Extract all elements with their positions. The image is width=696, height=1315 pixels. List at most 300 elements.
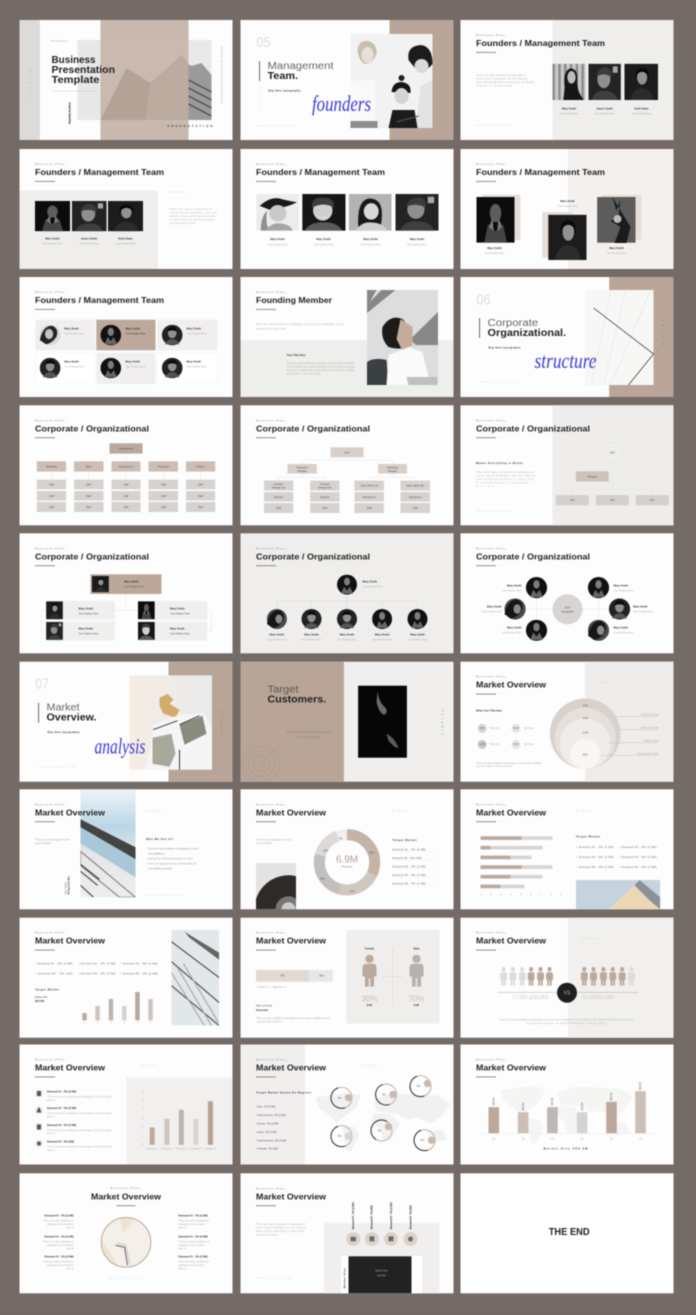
heading: Market Overview <box>35 936 105 946</box>
org chart: Production <box>296 466 309 469</box>
org chart: Staff <box>49 483 54 486</box>
org chart: Sales Officer (A) <box>360 484 378 487</box>
slide: market regions map <box>240 1044 454 1164</box>
left notes: form of <box>66 1247 74 1250</box>
who we sell: • Form, by injected humour, words which do <box>146 862 197 865</box>
org chart: Manager (A) <box>272 486 285 489</box>
org chart: Sales Officer (B) <box>406 484 424 487</box>
heading: Business Plan_ <box>256 1058 287 1062</box>
target market list <box>576 809 657 869</box>
horizontal bar chart <box>480 836 563 896</box>
heading: Business Plan_ <box>35 931 66 935</box>
card names: Mary Smith <box>64 360 79 364</box>
paragraph: There are many variations of passages of Lorem Ipsum available, but the majority have suffered alteration in some form <box>499 1019 635 1022</box>
who we sell: • Having the suffered alteration in some <box>146 857 193 860</box>
column chart: Category 1 <box>146 1148 159 1150</box>
cover title <box>52 39 115 91</box>
nested circle chart: 2.2M <box>583 732 588 735</box>
staff cards: Your Position Here <box>78 612 99 615</box>
paragraph: Ipsum available <box>256 842 273 845</box>
target market list: • Demand #1 - 5% (2.5M) <box>576 846 614 849</box>
region rings: 5% <box>417 1085 421 1088</box>
slide: market oval image <box>20 1173 232 1293</box>
split bar: • Staff 1 • Market 1 <box>256 986 287 989</box>
heading: Business Plan_ <box>256 162 287 166</box>
slide: market circles <box>460 662 674 782</box>
paragraph: have suffered alteration in some form, by injected <box>476 81 535 84</box>
versus badge <box>498 983 638 1003</box>
market size card <box>340 1256 422 1293</box>
heading <box>476 675 546 694</box>
gender panel: Male <box>414 947 420 951</box>
target market list: • Demand #3 - 5% (2.5M) <box>576 856 614 859</box>
team names: Your Position Here <box>267 638 287 641</box>
bar chart: Q1 <box>492 1138 496 1140</box>
sub text: Your Title Here <box>286 353 306 357</box>
names: Mary Smith <box>560 199 575 203</box>
section title: Big Idea typography <box>488 346 521 350</box>
stat pills: 2.5M <box>480 743 485 746</box>
slide: org chart five columns <box>20 405 232 525</box>
org chart: Staff <box>49 506 54 509</box>
right notes: form of <box>178 1267 186 1270</box>
icon list <box>35 1090 112 1152</box>
names: Kelly Dawn <box>118 236 133 240</box>
org chart <box>556 443 669 505</box>
staff cards: Your Position Here <box>170 632 191 635</box>
portraits <box>552 64 658 100</box>
heading <box>35 418 149 438</box>
right notes: There are many variations of <box>178 1240 209 1243</box>
labels: Mary Smith <box>507 583 522 587</box>
right notes: There are many variations of <box>178 1219 209 1222</box>
slide: market demand list and chart <box>20 1044 232 1164</box>
slide: market size bars <box>460 1044 674 1164</box>
market size label: Market Size 589.3M <box>544 1146 588 1150</box>
bar chart: Q3 <box>551 1138 555 1140</box>
donut chart: Prognosis <box>342 866 353 869</box>
world map <box>316 1092 450 1152</box>
section number: 06 <box>476 292 490 308</box>
right notes: Demand #1 - 5% (2.5M) <box>178 1255 208 1259</box>
region list: • Asia - 5% (2.5M) <box>256 1106 275 1108</box>
demand list: • Demand #5 - 5% (2.5M) <box>78 972 116 975</box>
website: www.strategyix.com <box>480 380 518 384</box>
column chart: 5 <box>142 1100 144 1102</box>
labels: Your Position Here <box>502 631 522 634</box>
heading <box>256 802 326 822</box>
heading: Business Plan_ <box>35 546 66 550</box>
market size: Market Size <box>35 996 48 999</box>
slide: org chart CEO tree <box>240 405 454 525</box>
donut chart: 15% <box>323 849 329 852</box>
who we sell: www.strategyix.com <box>146 892 184 896</box>
target market list: • Demand #2 - 5% (2.5M) <box>620 846 657 849</box>
team names: Mary Smith <box>304 632 319 636</box>
section title: Organizational. <box>488 328 566 339</box>
org chart <box>264 447 430 513</box>
labels: Your Position Here <box>614 631 634 634</box>
bar chart: $35.5M <box>610 1093 613 1100</box>
heading <box>476 546 590 566</box>
card names: Mary Smith <box>64 327 79 331</box>
section title: Management <box>268 61 334 72</box>
slide: market horizontal bars <box>460 789 674 909</box>
names: Mary Smith <box>487 246 502 250</box>
icon list: There are many variations of passages of Lorem Ipsum <box>47 1096 112 1098</box>
icon list: Demand #1 - 5% (2.5M) <box>47 1090 76 1094</box>
heading: Business Plan_ <box>256 802 287 806</box>
paragraph: There are many variations of passages of Lorem Ipsum available, but the <box>256 323 345 326</box>
org chart: Staff <box>413 507 418 510</box>
org chart: Staff <box>161 483 166 486</box>
right notes <box>178 1214 209 1270</box>
side kicker: PixFlon_ <box>142 1064 160 1068</box>
team names: Mary Smith <box>270 632 284 636</box>
side text: PixFlon_ <box>170 191 187 194</box>
photo: building <box>78 40 212 120</box>
names: Your Position Here <box>268 244 288 246</box>
card names: Your Position Here <box>64 365 85 368</box>
left notes: passage of Lorem Ipsum <box>47 1223 74 1226</box>
heading: Corporate / Organizational <box>476 423 590 433</box>
names <box>485 199 627 255</box>
column chart: Category 4 <box>190 1148 202 1150</box>
cover title: Template <box>52 75 100 86</box>
paragraph: by injected humour, or randomised words looking slightly <box>527 1022 608 1025</box>
heading <box>476 931 546 950</box>
section title <box>479 318 566 350</box>
slide: the end <box>460 1173 674 1293</box>
org chart: Staff <box>198 495 203 498</box>
oval image <box>101 1217 151 1267</box>
center circle <box>552 594 582 624</box>
heading: Market Overview <box>256 807 326 817</box>
region rings: 5% <box>382 1094 387 1096</box>
centered heading: Market Overview <box>91 1191 161 1201</box>
org chart: Assistant <box>274 483 284 486</box>
org chart: Staff <box>49 495 54 498</box>
gender panel: 9.9K <box>367 1003 372 1007</box>
heading: Founders / Management Team <box>476 38 605 48</box>
split bar <box>256 970 333 989</box>
heading: Business Plan_ <box>256 546 287 550</box>
round portraits <box>40 325 182 378</box>
column chart: 2 <box>97 1022 99 1025</box>
stat pills: 5.5K <box>514 743 519 746</box>
slide: founders card grid <box>20 277 232 397</box>
region list: • South America - 5% (2.5M) <box>256 1140 286 1142</box>
paragraph: Lorem Ipsum available, but the majority <box>476 78 529 80</box>
org chart: Manager <box>388 470 397 473</box>
slide: target customers <box>240 662 454 782</box>
org chart: Marketing <box>46 465 57 468</box>
icon list: form of <box>47 1116 55 1118</box>
website: www.strategyix.com <box>108 1276 145 1280</box>
vertical side labels: SIMPLEX <box>30 70 32 96</box>
paragraph <box>35 838 70 845</box>
heading: Founders / Management Team <box>35 167 164 177</box>
market size <box>35 987 59 1003</box>
photo: team of three <box>350 34 432 128</box>
stat pills: Title Here <box>490 727 500 730</box>
target market list: PixFlon_ <box>392 809 410 812</box>
names <box>559 106 652 116</box>
paragraph <box>476 762 543 768</box>
target market list: PixFlon_ <box>576 809 594 812</box>
heading <box>35 290 164 310</box>
gender panel <box>346 930 440 1024</box>
paragraph <box>499 1019 635 1025</box>
labels: Mary Smith <box>614 583 628 587</box>
org chart: Development <box>119 465 133 468</box>
paragraph <box>476 74 535 88</box>
section title: Corporate <box>488 318 539 329</box>
org chart: Staff <box>124 483 129 486</box>
paragraph <box>256 838 292 845</box>
org chart: Salesperson <box>409 496 423 499</box>
paragraph <box>256 1223 307 1236</box>
stat pills: Title Here <box>524 743 534 746</box>
section title: Overview. <box>46 713 97 724</box>
nested circle chart <box>550 698 620 769</box>
card names: Mary Smith <box>126 360 140 364</box>
chart callouts: Market Share <box>644 740 659 743</box>
heading: Business Plan_ <box>256 1186 287 1190</box>
left notes: form of <box>66 1267 74 1270</box>
heading: Corporate / Organizational <box>256 551 370 561</box>
icon pins with vertical labels <box>346 1202 418 1246</box>
staff cards: Mary Smith <box>78 606 93 610</box>
staff cards: Mary Smith <box>170 627 185 631</box>
vertical side labels: Prepared by Your Name <box>68 102 72 124</box>
heading <box>256 546 370 566</box>
website: www.strategyix.com <box>476 508 514 512</box>
heading <box>35 546 149 566</box>
section title <box>38 703 97 734</box>
team names <box>267 632 428 641</box>
left notes: Demand #1 - 5% (2.5M) <box>44 1235 74 1239</box>
names: Mary Smith <box>562 106 577 110</box>
donut chart: 6.9M <box>336 854 358 865</box>
donut chart: 7% <box>339 837 343 840</box>
chart callouts: Market Potential <box>641 727 659 730</box>
sub text <box>286 353 355 376</box>
team names: Mary Smith <box>410 632 425 636</box>
heading <box>256 1058 326 1077</box>
names: Your Position Here <box>407 244 428 246</box>
staff cards: Your Position Here <box>78 632 99 635</box>
heading: Business Plan_ <box>35 162 66 166</box>
heading: Business Plan_ <box>476 802 507 806</box>
org chart: Staff <box>367 507 372 510</box>
org chart: Engineer <box>274 496 283 499</box>
org chart: Assistant <box>320 483 330 486</box>
staff cards: Mary Smith <box>78 627 93 631</box>
heading <box>476 1058 546 1077</box>
heading: Corporate / Organizational <box>476 551 590 561</box>
org chart: Staff <box>86 495 91 498</box>
portrait cards <box>476 195 641 260</box>
website: www.strategyix.com <box>39 765 77 769</box>
org chart: Staff <box>86 506 91 509</box>
bar chart: $25.5M <box>522 1103 525 1110</box>
heading <box>476 418 590 438</box>
team names: Your Position Here <box>372 638 393 641</box>
heading: Business Plan_ <box>35 418 66 422</box>
left notes: There are many variations of <box>43 1219 74 1222</box>
presentation label: PRESENTATION <box>168 124 213 128</box>
org chart: Staff <box>276 507 281 510</box>
org chart: Finance <box>196 465 205 468</box>
labels: Your Position Here <box>502 589 522 592</box>
heading: Market Overview <box>256 1062 326 1072</box>
script word: structure: structure <box>534 348 597 373</box>
heading <box>35 162 164 182</box>
card names: Mary Smith <box>186 360 201 364</box>
bar chart: Q4 <box>580 1138 584 1140</box>
center circle: Best <box>565 606 570 609</box>
section title: Big Idea typography <box>268 88 301 92</box>
target icon <box>244 746 280 782</box>
target market list: Demand #5 - 5% (2.5M) <box>392 883 426 886</box>
region list: Target Market Based On Regions <box>256 1090 312 1094</box>
centered heading: Business Plan_ <box>110 1186 142 1190</box>
heading <box>35 1058 105 1077</box>
photo: vinyl <box>255 862 297 910</box>
slide: founding member <box>240 277 454 397</box>
totals <box>512 995 614 1001</box>
photo: dark arms <box>358 686 407 758</box>
paragraph: Lorem Ipsum available <box>296 736 321 739</box>
side text: randomised words <box>170 222 196 225</box>
names: Mary Smith <box>363 237 378 241</box>
demand list: • Demand #2 - 5% (2.5M) <box>78 963 116 966</box>
icon pins with vertical labels: Demand #4 - 5% (2M) <box>408 1205 412 1229</box>
column chart: 1 <box>142 1134 144 1138</box>
right notes: passage of Lorem Ipsum <box>178 1244 205 1247</box>
website: www.strategyix.com <box>256 1276 294 1280</box>
slide: founders three portraits <box>460 20 674 140</box>
right notes: passage of Lorem Ipsum <box>178 1264 205 1267</box>
text block: Overview <box>256 1008 269 1012</box>
column chart: 0 <box>142 1144 144 1146</box>
cover title: Presentation <box>52 65 115 76</box>
donut chart: 25% <box>320 877 326 880</box>
org chart: Engineer <box>320 496 330 499</box>
right notes: passage of Lorem Ipsum <box>178 1223 205 1226</box>
lead portrait <box>337 575 383 595</box>
center circle: Typography <box>561 610 575 613</box>
names: Your Position Here <box>361 244 381 246</box>
demand list: • Demand #6 - 5% (2.5M) <box>120 972 158 975</box>
names: Your Position Here <box>632 112 652 116</box>
section title: Customers. <box>268 695 326 706</box>
bar chart: $50.5M <box>639 1082 642 1090</box>
heading: Founders / Management Team <box>35 295 164 305</box>
text block: Male & Female <box>256 1005 273 1008</box>
team names: Mary Smith <box>340 632 355 636</box>
vertical label: SIMPLEX <box>220 709 224 735</box>
side text: in some form, by injected humour <box>170 218 215 222</box>
names: Your Position Here <box>559 112 580 116</box>
heading: Market Overview <box>476 807 546 817</box>
names: Mary Smith <box>609 246 624 250</box>
bar chart: Q2 <box>521 1138 525 1140</box>
photo: facade <box>172 930 219 1026</box>
text block: There are many variations of passages of <box>476 471 534 474</box>
paragraph: There are many passages of Lorem <box>35 838 70 841</box>
bar chart: $30.5M <box>492 1098 496 1106</box>
region list <box>256 1090 312 1150</box>
photo: tower <box>130 675 212 770</box>
heading: Market Overview <box>476 936 546 946</box>
photo: woman <box>367 290 438 385</box>
heading: Business Plan_ <box>256 290 287 294</box>
heading: Market Overview <box>476 1062 546 1072</box>
who we sell: Who We Get In? <box>146 837 173 841</box>
demand list: • Demand #3 - 5% (2.5M) <box>120 963 158 966</box>
team names: Your Position Here <box>337 638 358 641</box>
text block: majority have suffered <box>256 1020 282 1023</box>
vertical label: SIMPLEX <box>442 709 444 735</box>
icon list: form of <box>47 1149 55 1152</box>
names: Mary Smith <box>316 237 331 241</box>
market size card: $72.5M <box>378 1274 385 1277</box>
section title: Team. <box>268 71 298 82</box>
heading: Business Plan_ <box>35 1058 66 1062</box>
card names: Your Position Here <box>186 332 207 335</box>
icon list: There are many variations of passages of Lorem Ipsum <box>47 1112 112 1115</box>
connectors <box>516 587 620 630</box>
slide: radial team diagram <box>460 533 674 653</box>
heading <box>256 290 333 310</box>
paragraph: Ipsum available <box>35 842 52 845</box>
heading: Market Overview <box>256 1191 326 1201</box>
column chart <box>142 1090 217 1150</box>
section number: 05 <box>256 34 270 51</box>
slide: corporate organizational section <box>460 277 674 397</box>
chart callouts <box>600 714 659 755</box>
heading <box>476 802 546 822</box>
stat pills: Title Here <box>490 743 500 746</box>
heading: Corporate / Organizational <box>35 423 149 433</box>
slide: market people versus <box>460 918 674 1038</box>
text block: Lorem Ipsum available, but the majority <box>476 474 537 477</box>
paragraph: have suffered alteration in some form <box>256 1230 304 1233</box>
chart callouts: Market Potential <box>641 714 659 717</box>
org chart: CMT <box>610 499 615 502</box>
card names: Your Position Here <box>126 332 146 335</box>
slide: market column chart with photo <box>20 918 232 1038</box>
org chart: CEO <box>610 452 615 455</box>
left notes: Demand #1 - 5% (2.5M) <box>44 1255 74 1259</box>
card names: Mary Smith <box>126 327 140 331</box>
region list: • Europe - 5% (2.5M) <box>256 1122 279 1126</box>
left notes: passage of Lorem Ipsum <box>47 1264 74 1267</box>
donut chart <box>319 835 375 893</box>
cover title: PixFlon_ <box>52 39 69 43</box>
column chart: 4 <box>124 1022 126 1025</box>
names: Your Position Here <box>558 205 578 208</box>
heading: Corporate / Organizational <box>35 551 149 561</box>
heading: Market Overview <box>256 936 326 946</box>
staff cards: Your Position Here <box>170 612 191 615</box>
split bar: 30% <box>319 975 325 978</box>
region rings: 5% <box>421 1139 425 1142</box>
photo: building corner <box>576 880 660 909</box>
cards <box>36 320 218 384</box>
